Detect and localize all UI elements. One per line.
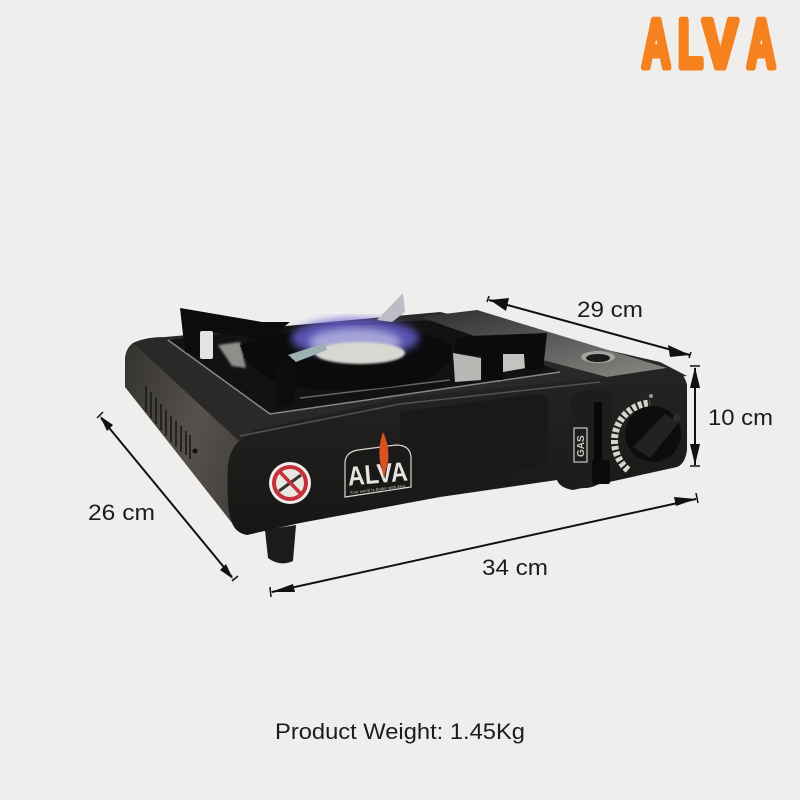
control panel: gas cartridge lever: GAS bbox=[576, 435, 587, 457]
control panel: gas cartridge lever bbox=[569, 390, 612, 488]
logo: ALVA: A bbox=[747, 6, 775, 82]
logo: ALVA: L bbox=[678, 5, 703, 82]
stove left side face bbox=[125, 338, 300, 523]
logo: ALVA: V bbox=[703, 5, 737, 82]
front recessed panel bbox=[400, 394, 548, 494]
cartridge lid bbox=[420, 310, 667, 377]
burner flame bbox=[291, 318, 419, 358]
label: 10 cm: 10 cm bbox=[708, 405, 773, 430]
dimension arrow: depth 26 cm bbox=[97, 412, 238, 581]
side screw hole bbox=[192, 448, 198, 454]
control panel: ignition dial bbox=[614, 394, 681, 470]
flame guard highlight bbox=[288, 343, 327, 362]
side vent grille bbox=[146, 386, 190, 459]
logo: ALVA bbox=[642, 5, 775, 82]
burner front rim bbox=[243, 345, 452, 384]
stove foot bbox=[265, 525, 296, 563]
front pot support bbox=[276, 356, 296, 407]
gas cartridge hole bbox=[581, 351, 615, 363]
dimension arrow: height 10 cm bbox=[690, 366, 700, 466]
label: 34 cm: 34 cm bbox=[482, 555, 548, 580]
stove top surface bbox=[133, 312, 687, 440]
sticker: no smoking bbox=[269, 462, 311, 504]
stove badge: ALVA: ALVA bbox=[346, 456, 409, 492]
left pot support bbox=[180, 308, 290, 360]
white standoff bbox=[200, 331, 213, 359]
stove badge: ALVA bbox=[345, 432, 411, 497]
recess reflections bbox=[218, 342, 526, 398]
product photo: gas stove bbox=[125, 293, 687, 563]
logo: ALVA: A bbox=[642, 6, 670, 82]
burner bowl bbox=[240, 326, 452, 390]
label: 26 cm: 26 cm bbox=[88, 500, 155, 525]
dimension arrow: back width 29 cm bbox=[487, 296, 691, 358]
back pot support tip bbox=[377, 293, 405, 322]
burner plate bbox=[315, 342, 405, 364]
label: 29 cm: 29 cm bbox=[577, 297, 643, 322]
cooktop recess bbox=[168, 320, 560, 414]
product weight caption: Product Weight: 1.45Kg bbox=[275, 719, 525, 744]
stove front face bbox=[228, 368, 687, 535]
stove badge: ALVA: Your world is better with Alva bbox=[350, 483, 406, 495]
right pot support bbox=[455, 333, 547, 380]
dimension arrow: width 34 cm bbox=[270, 493, 698, 597]
